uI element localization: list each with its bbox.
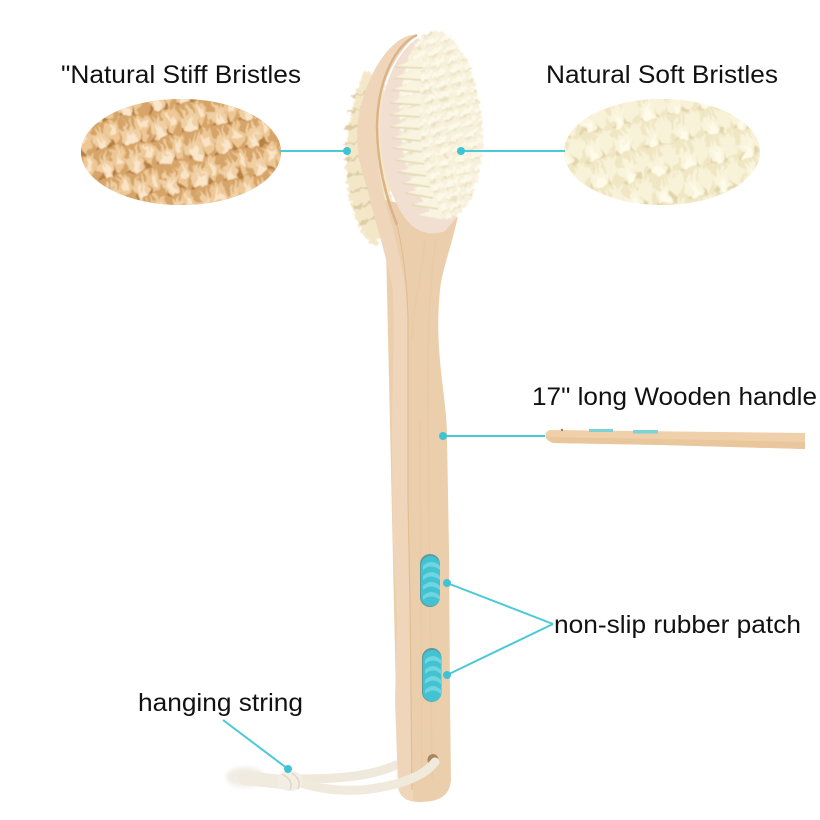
rubber pad — [380, 38, 456, 233]
front soft bristles — [390, 28, 488, 222]
heading: hanging string: hanging string — [138, 689, 303, 717]
wooden handle, front facet — [385, 200, 458, 802]
heading: natural stiff bristles: "Natural Stiff Bristles — [61, 61, 301, 89]
callout lines and dots — [223, 147, 565, 773]
hanging hole — [428, 754, 438, 766]
brush illustration — [300, 28, 488, 802]
handle product photo — [545, 429, 805, 449]
heading: handle: 17" long Wooden handle — [532, 383, 817, 411]
top rubber patch — [420, 554, 440, 607]
soft bristle close-up — [564, 99, 760, 205]
facet line — [397, 225, 412, 790]
bottom rubber patch — [422, 648, 442, 702]
hanging string — [226, 762, 435, 791]
wooden head rim and left facet — [357, 35, 417, 801]
wood grain — [412, 240, 436, 780]
rim inner shading — [377, 35, 417, 225]
rear stiff bristles — [344, 70, 392, 248]
heading: rubber patch: non-slip rubber patch — [554, 611, 801, 639]
heading: natural soft bristles: Natural Soft Bristles — [546, 61, 778, 89]
stiff bristle close-up — [81, 99, 281, 205]
hanging string, rear strand — [300, 765, 396, 779]
